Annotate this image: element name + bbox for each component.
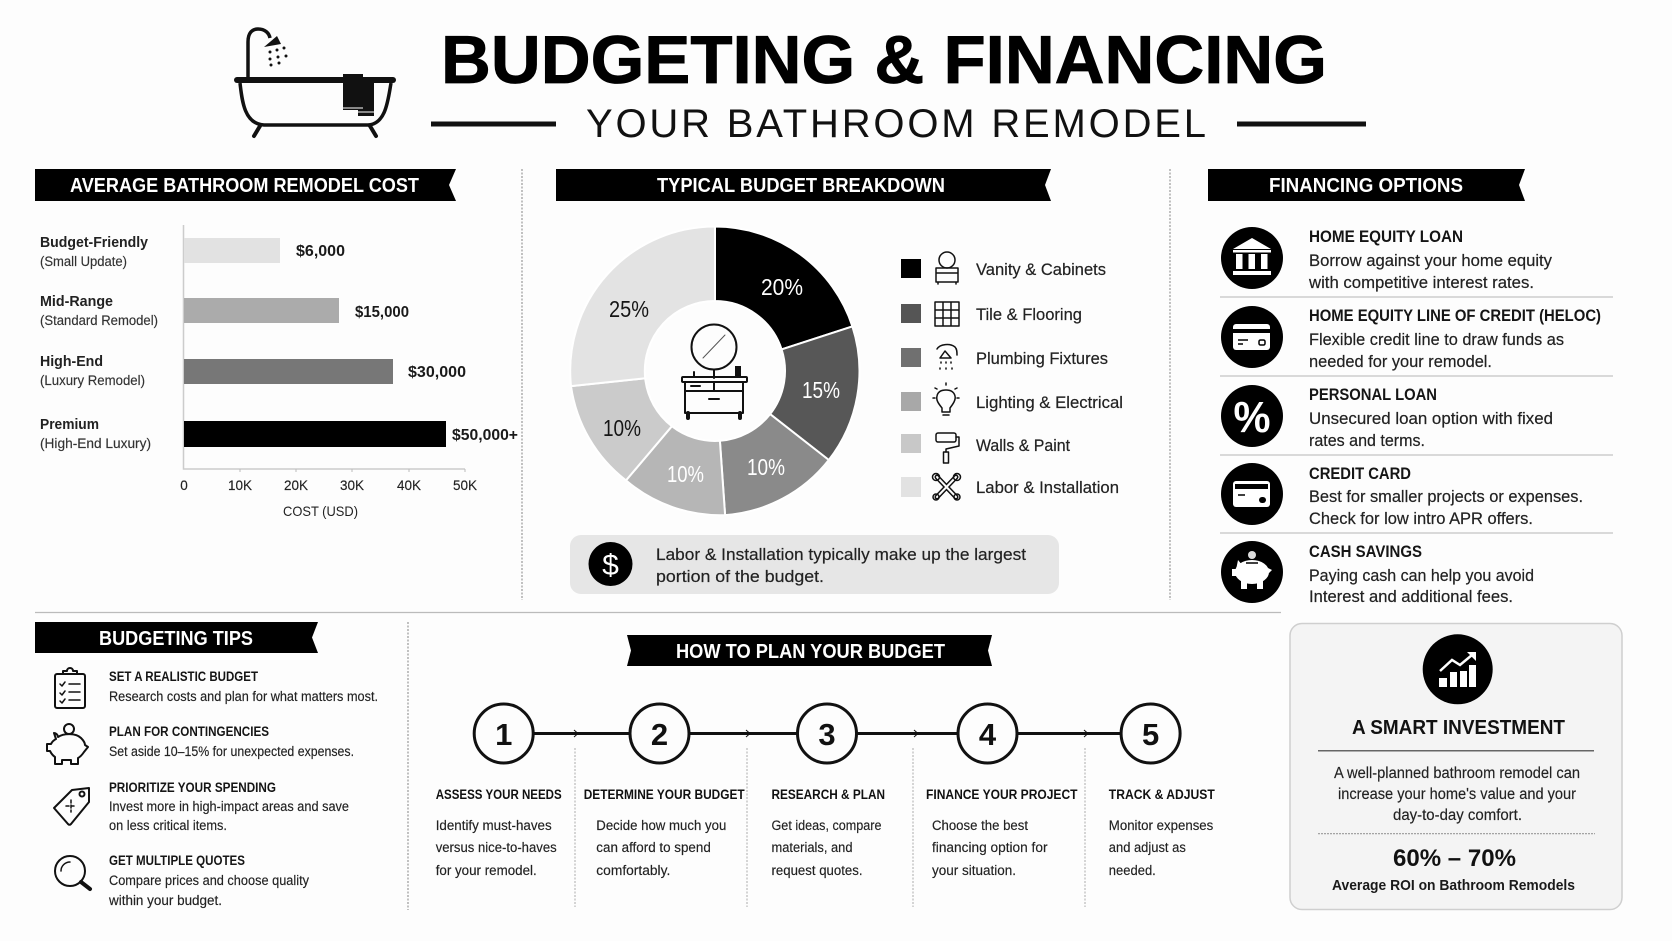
bar chart: $15,000 — [355, 304, 409, 321]
tip: realistic budget: SET A REALISTIC BUDGET — [109, 669, 259, 684]
title: BUDGETING & FINANCING — [441, 22, 1327, 98]
step 2 — [584, 787, 745, 878]
step 1: versus nice-to-haves — [436, 840, 557, 855]
panel: typical budget breakdown — [556, 169, 1123, 594]
bar chart: 50K — [453, 478, 477, 493]
icon: vanity — [682, 324, 747, 418]
tip: prioritize: on less critical items. — [109, 818, 227, 833]
option: credit card — [1221, 463, 1583, 528]
option: cash savings: Paying cash can help you avoid — [1309, 567, 1534, 585]
card body — [1334, 765, 1580, 824]
option: heloc — [1221, 306, 1601, 371]
bar chart: Mid-Range — [40, 293, 113, 310]
legend row: tile & flooring: Tile & Flooring — [976, 305, 1082, 324]
step 4: Choose the best — [932, 818, 1028, 833]
heading: BUDGETING TIPS — [99, 628, 253, 650]
step 4 — [926, 787, 1078, 878]
legend row: labor & installation — [901, 474, 1119, 500]
step 5: needed. — [1109, 863, 1156, 878]
bar chart: 0 — [180, 478, 188, 493]
step 2: can afford to spend — [596, 840, 711, 855]
legend row: labor & installation: Labor & Installation — [976, 478, 1119, 497]
callout — [570, 535, 1059, 594]
bar chart: 20K — [284, 478, 308, 493]
donut labels — [603, 274, 840, 487]
icon: price tag — [54, 788, 89, 825]
tip: multiple quotes: within your budget. — [108, 893, 222, 908]
option: cash savings: Interest and additional fees. — [1309, 588, 1513, 606]
option: home equity loan: with competitive interest rates. — [1308, 274, 1534, 292]
option: personal loan — [1221, 385, 1553, 450]
bar chart: $6,000 — [296, 243, 345, 260]
step 5: and adjust as — [1109, 840, 1186, 855]
card body: A well-planned bathroom remodel can — [1334, 765, 1580, 782]
statistic caption: Average ROI on Bathroom Remodels — [1332, 877, 1575, 894]
panel: a smart investment — [1290, 624, 1622, 910]
timeline: 4 — [979, 717, 997, 752]
option: cash savings: CASH SAVINGS — [1309, 543, 1422, 561]
option: heloc: needed for your remodel. — [1309, 353, 1492, 371]
option: personal loan: rates and terms. — [1309, 432, 1425, 450]
option: credit card: CREDIT CARD — [1309, 465, 1411, 483]
step 4: your situation. — [932, 863, 1016, 878]
timeline: 3 — [818, 717, 836, 752]
donut labels: 25% — [609, 296, 649, 322]
donut labels: 15% — [802, 377, 840, 403]
step 3 — [772, 787, 885, 878]
bar chart: 30K — [340, 478, 364, 493]
step 2: Decide how much you — [596, 818, 726, 833]
step 1: ASSESS YOUR NEEDS — [436, 787, 562, 802]
bar chart: Premium — [40, 416, 99, 433]
legend row: plumbing fixtures — [901, 345, 1108, 369]
option: home equity loan: Borrow against your home equity — [1309, 252, 1553, 270]
option: personal loan: PERSONAL LOAN — [1309, 386, 1437, 404]
icon: percent: % — [1234, 393, 1270, 442]
tip: multiple quotes: GET MULTIPLE QUOTES — [109, 853, 245, 868]
tip: prioritize: Invest more in high-impact areas and save — [109, 799, 349, 814]
tip: realistic budget — [55, 668, 378, 708]
bar chart: 40K — [397, 478, 421, 493]
heading — [35, 622, 318, 653]
panel: average bathroom remodel cost — [35, 169, 518, 519]
step 5: TRACK & ADJUST — [1109, 787, 1215, 802]
icon: bathtub with shower — [234, 29, 396, 136]
heading: FINANCING OPTIONS — [1269, 175, 1463, 197]
option: credit card: Check for low intro APR offers. — [1309, 510, 1533, 528]
tip: multiple quotes: Compare prices and choose quality — [109, 873, 309, 888]
timeline — [474, 704, 1180, 763]
donut labels: 10% — [667, 461, 704, 487]
donut labels: 10% — [747, 454, 785, 480]
bar chart: COST (USD) — [283, 503, 358, 519]
card body: increase your home's value and your — [1338, 786, 1576, 803]
icon: magnifier — [55, 856, 90, 889]
icon: dollar — [588, 542, 632, 586]
heading: HOW TO PLAN YOUR BUDGET — [676, 641, 945, 663]
card body: day-to-day comfort. — [1393, 807, 1522, 824]
heading: AVERAGE BATHROOM REMODEL COST — [70, 175, 419, 197]
icon: bank — [1221, 227, 1283, 289]
legend row: lighting & electrical — [901, 383, 1123, 415]
icon: credit line card — [1221, 306, 1283, 368]
donut labels: 20% — [761, 274, 803, 300]
tip: contingencies: PLAN FOR CONTINGENCIES — [109, 724, 269, 739]
card title: A SMART INVESTMENT — [1352, 717, 1565, 739]
icon: piggy bank — [1221, 541, 1283, 603]
callout: portion of the budget. — [656, 567, 824, 586]
step 2: DETERMINE YOUR BUDGET — [584, 787, 745, 802]
heading: TYPICAL BUDGET BREAKDOWN — [657, 175, 945, 197]
subtitle: YOUR BATHROOM REMODEL — [586, 102, 1206, 146]
donut chart — [570, 226, 859, 515]
option: heloc: Flexible credit line to draw funds as — [1309, 331, 1564, 349]
statistic: 60% – 70% — [1393, 845, 1516, 872]
heading — [35, 169, 456, 201]
step 3: request quotes. — [772, 863, 862, 878]
tip: contingencies — [47, 724, 354, 764]
bar chart: Budget-Friendly — [40, 234, 149, 251]
panel: budgeting tips — [35, 622, 378, 908]
icon: percent — [1221, 385, 1283, 447]
heading — [627, 635, 992, 666]
icon: growth chart — [1423, 634, 1493, 704]
legend row: lighting & electrical: Lighting & Electrical — [976, 393, 1123, 412]
step 3: materials, and — [772, 840, 852, 855]
icon: credit card — [1221, 463, 1283, 525]
step 1: for your remodel. — [436, 863, 537, 878]
legend row: walls & paint: Walls & Paint — [976, 436, 1070, 455]
heading — [1208, 169, 1525, 201]
step 3: Get ideas, compare — [772, 818, 882, 833]
timeline: 1 — [495, 717, 512, 752]
panel: financing options — [1208, 169, 1613, 606]
header — [234, 22, 1366, 146]
bar chart: 10K — [228, 478, 252, 493]
timeline: 2 — [651, 717, 668, 752]
step 4: FINANCE YOUR PROJECT — [926, 787, 1078, 802]
bar chart: (Standard Remodel) — [40, 313, 158, 328]
bar chart: High-End — [40, 353, 103, 370]
step 2: comfortably. — [596, 863, 670, 878]
bar chart — [40, 225, 518, 519]
option: credit card: Best for smaller projects or expenses. — [1309, 488, 1583, 506]
icon: piggy bank outline — [47, 724, 88, 764]
step 1 — [436, 787, 562, 878]
bar chart: (Luxury Remodel) — [40, 373, 145, 388]
tip: prioritize: PRIORITIZE YOUR SPENDING — [109, 780, 276, 795]
panel: how to plan your budget — [436, 635, 1215, 907]
option: home equity loan — [1221, 227, 1553, 292]
legend — [901, 252, 1123, 500]
bar chart: (High-End Luxury) — [40, 436, 151, 451]
option: personal loan: Unsecured loan option with fixed — [1309, 410, 1553, 428]
icon: dollar: $ — [602, 549, 619, 582]
step 4: financing option for — [932, 840, 1048, 855]
step 5 — [1109, 787, 1215, 878]
step 5: Monitor expenses — [1109, 818, 1214, 833]
legend row: walls & paint — [901, 433, 1070, 463]
tip: multiple quotes — [55, 853, 309, 908]
timeline: 5 — [1142, 717, 1159, 752]
option: heloc: HOME EQUITY LINE OF CREDIT (HELOC) — [1309, 307, 1601, 325]
bar chart: (Small Update) — [40, 254, 127, 269]
icon: clipboard — [55, 668, 85, 708]
heading — [556, 169, 1051, 201]
option: cash savings — [1221, 541, 1534, 606]
step 3: RESEARCH & PLAN — [772, 787, 885, 802]
legend row: plumbing fixtures: Plumbing Fixtures — [976, 349, 1108, 368]
tip: realistic budget: Research costs and plan for what matters most. — [109, 689, 378, 704]
tip: contingencies: Set aside 10–15% for unexpected expenses. — [109, 744, 354, 759]
tip: prioritize — [54, 780, 349, 833]
donut labels: 10% — [603, 415, 641, 441]
bar chart: $50,000+ — [452, 427, 518, 444]
legend row: vanity & cabinets: Vanity & Cabinets — [976, 260, 1106, 279]
step 1: Identify must-haves — [436, 818, 552, 833]
legend row: tile & flooring — [901, 302, 1082, 326]
bar chart: $30,000 — [408, 364, 466, 381]
legend row: vanity & cabinets — [901, 252, 1106, 284]
callout: Labor & Installation typically make up the largest — [656, 545, 1026, 564]
option: home equity loan: HOME EQUITY LOAN — [1309, 228, 1463, 246]
